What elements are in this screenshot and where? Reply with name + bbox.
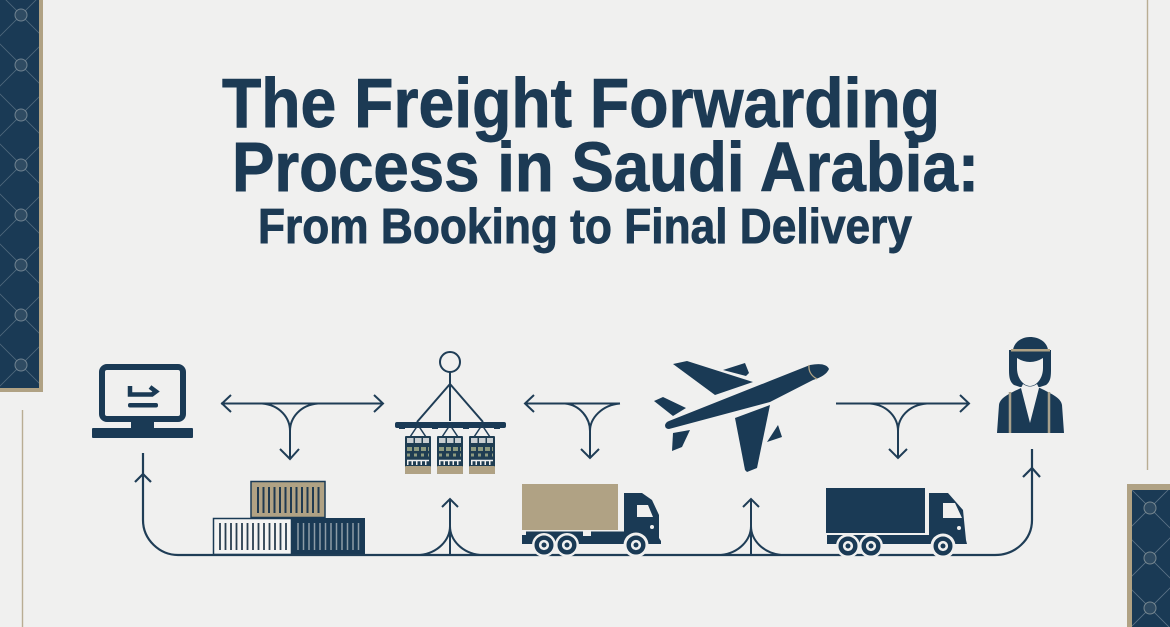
subtitle: From Booking to Final Delivery xyxy=(258,200,912,254)
title xyxy=(222,64,979,254)
title: The Freight Forwarding xyxy=(222,64,940,142)
icon: delivery recipient person xyxy=(997,337,1064,433)
icon: truck with tan cargo box xyxy=(522,484,661,558)
title: Process in Saudi Arabia: xyxy=(232,128,979,206)
arrow: junction two xyxy=(525,395,620,458)
icon: stacked containers xyxy=(214,482,365,555)
icon: cargo airplane xyxy=(654,361,829,472)
arrow: upward branch at crane xyxy=(420,499,480,555)
panel: left decorative lattice xyxy=(0,0,43,392)
arrow: junction three xyxy=(836,395,969,458)
arrow: upward branch at airplane xyxy=(721,499,781,555)
icon: booking computer xyxy=(92,367,193,438)
arrow: junction one xyxy=(221,395,383,459)
icon: crane lifting cargo xyxy=(395,352,506,474)
arrow: return route baseline xyxy=(135,449,1040,555)
icon: truck with navy cargo box xyxy=(826,488,967,558)
panel: right decorative lattice xyxy=(1127,484,1170,627)
